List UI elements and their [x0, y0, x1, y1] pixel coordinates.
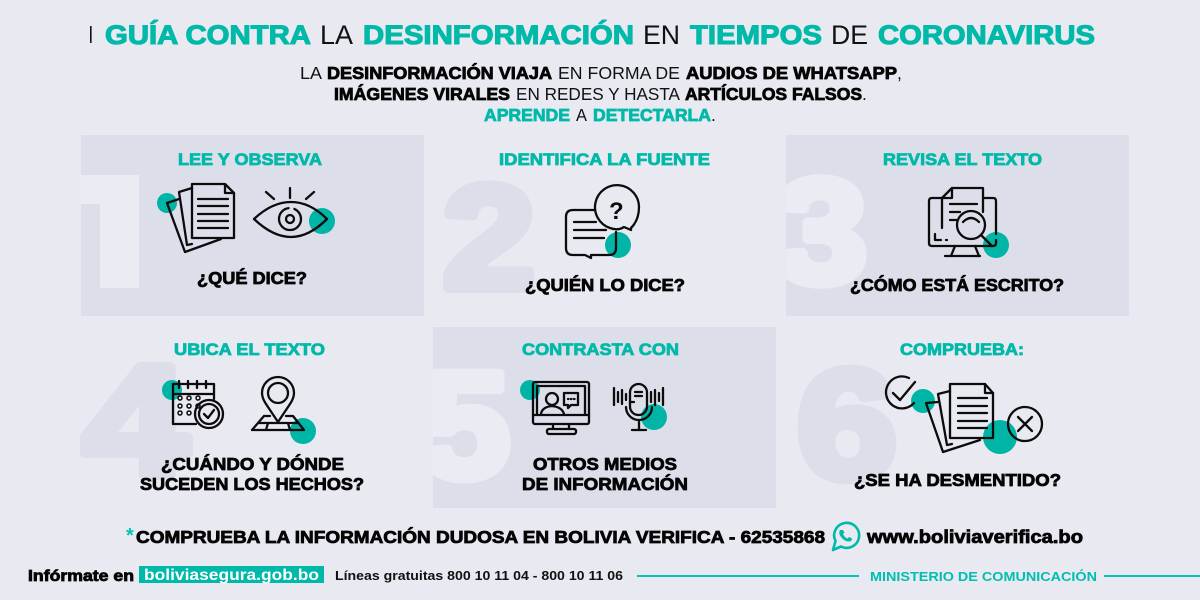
intro text: DESINFORMACIÓN VIAJA [327, 62, 552, 83]
label: se ha desmentido: ¿SE HA DESMENTIDO? [854, 470, 1061, 490]
label: suceden los hechos: SUCEDEN LOS HECHOS? [140, 474, 364, 494]
icon: chat bubbles: ? [609, 198, 624, 225]
icon: calendar with clock [162, 380, 223, 428]
footer: toll-free lines: Líneas gratuitas 800 10 11 04 - 800 10 11 06 [335, 568, 623, 583]
heading: lee y observa: LEE Y OBSERVA [178, 150, 322, 169]
title: EN [643, 20, 680, 50]
footer: ministry: MINISTERIO DE COMUNICACIÓN [870, 569, 1097, 584]
panel: lee y observa [78, 135, 424, 316]
intro text: ARTÍCULOS FALSOS [685, 83, 862, 104]
intro text: AUDIOS DE WHATSAPP [686, 63, 897, 83]
intro text: . [711, 105, 716, 125]
label: quién lo dice: ¿QUIÉN LO DICE? [525, 274, 685, 295]
title [90, 19, 1095, 50]
label: otros medios: OTROS MEDIOS [533, 454, 677, 474]
heading: contrasta con: CONTRASTA CON [522, 340, 679, 359]
icon: microphone [614, 384, 667, 430]
title: TIEMPOS [690, 20, 822, 50]
number 4: 4 [83, 334, 188, 509]
label: cómo está escrito: ¿CÓMO ESTÁ ESCRITO? [850, 274, 1064, 295]
label: qué dice: ¿QUÉ DICE? [197, 267, 307, 288]
label: de información: DE INFORMACIÓN [522, 473, 688, 494]
icon: chat bubbles [566, 185, 639, 258]
icon: video monitor [520, 380, 589, 434]
title: GUÍA CONTRA [105, 19, 311, 50]
icon: documents with check and cross [886, 376, 1042, 454]
icon: eye [254, 188, 335, 237]
footer: boliviasegura link: boliviasegura.gob.bo [144, 567, 319, 584]
heading: identifica la fuente: IDENTIFICA LA FUENTE [499, 150, 710, 169]
label: cuándo y dónde: ¿CUÁNDO Y DÓNDE [161, 453, 344, 474]
title: CORONAVIRUS [878, 20, 1095, 50]
intro text: LA [300, 63, 322, 83]
number 1: 1 [78, 154, 159, 316]
title: LA [320, 20, 353, 50]
intro text: APRENDE [484, 105, 570, 125]
verification line: * [126, 525, 134, 547]
intro text [300, 62, 902, 125]
number 6: 6 [797, 338, 897, 511]
icon: whatsapp [833, 523, 859, 550]
panel: identifica la fuente [443, 150, 710, 320]
heading: revisa el texto: REVISA EL TEXTO [883, 150, 1042, 169]
heading: comprueba: COMPRUEBA: [900, 340, 1024, 359]
number 3: 3 [775, 150, 867, 314]
icon: documents [157, 184, 234, 252]
footer: informate en: Infórmate en [28, 568, 134, 585]
intro text: EN REDES Y HASTA [516, 84, 680, 104]
intro text: . [862, 84, 867, 104]
intro text: EN FORMA DE [558, 63, 680, 83]
intro text: IMÁGENES VIRALES [334, 83, 510, 104]
website: www.boliviaverifica.bo [866, 526, 1083, 547]
icon: map pin [252, 377, 316, 444]
intro text: A [576, 105, 587, 125]
intro text: , [897, 63, 902, 83]
panel: revisa el texto [775, 135, 1129, 316]
intro text: DETECTARLA [593, 105, 711, 125]
panel: comprueba [797, 338, 1061, 511]
number 5: 5 [420, 341, 510, 509]
panel: contrasta con [420, 327, 776, 509]
heading: ubica el texto: UBICA EL TEXTO [174, 340, 325, 359]
panel: ubica el texto [83, 334, 364, 509]
number 2: 2 [443, 156, 535, 320]
icon: monitor with magnifier [929, 188, 1009, 258]
title: DESINFORMACIÓN [363, 19, 634, 50]
verification line: COMPRUEBA LA INFORMACIÓN DUDOSA EN BOLIVIA VERIFICA - 62535868 [136, 526, 825, 547]
title: DE [831, 20, 868, 50]
